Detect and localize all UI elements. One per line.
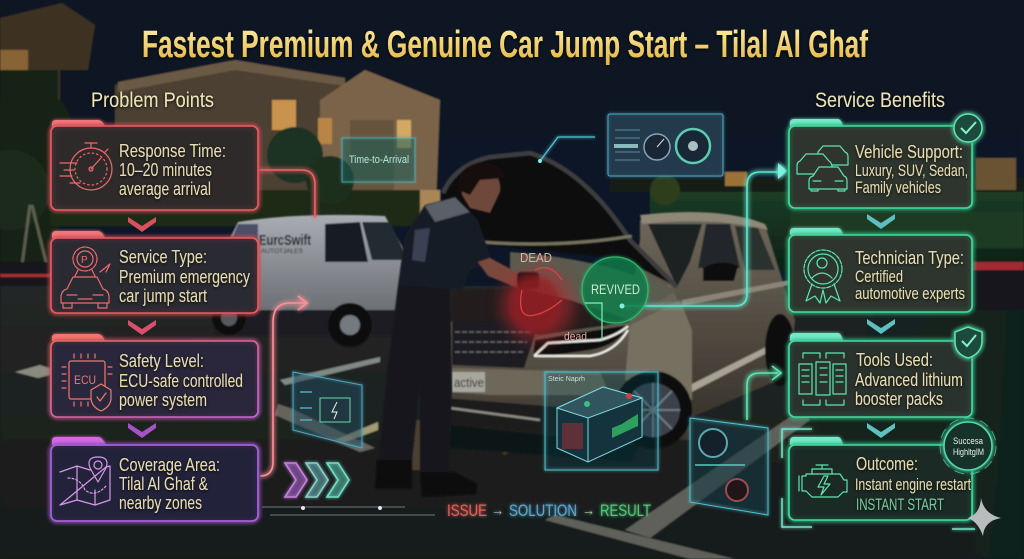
panel: safety level: ECU-safe controlled [119,370,243,391]
status: dead glow: dead [564,331,587,343]
flow caption: issue solution result: ISSUE [447,501,487,520]
status: revived circle [582,257,648,340]
delivery van: EurcSwift [259,232,311,249]
callout: time-to-arrival: Time-to-Arrival [349,154,409,166]
connector: pink line from coverage area with arrow [260,296,307,476]
callout: small battery hologram [293,372,362,448]
badge: success highlight: HighltgIM [953,447,984,457]
panel: outcome [782,429,975,529]
icon: lithium booster packs [799,353,846,405]
arrow: chevron down [128,320,156,335]
panel: outcome: Outcome: [856,453,918,474]
panel: safety level: Safety Level: [119,350,204,371]
panel: technician type: Technician Type: [855,247,964,268]
status: dead glow: DEAD [520,250,552,265]
flow caption: issue solution result: SOLUTION [509,501,577,520]
range rover suv with raised hood [440,153,795,462]
callout: dashboard hud [538,114,723,176]
delivery van: AUTOTJALES [261,249,303,255]
callout: gauges hologram [690,418,768,515]
connector: green line to tools used [747,366,781,420]
connector: red line from response time [258,170,315,218]
panel: response time [51,120,258,210]
panel: outcome: INSTANT START [856,496,944,514]
icon: three cars [797,146,848,191]
icon: ecu chip with shield [62,354,112,411]
flow caption: issue solution result: RESULT [600,501,651,520]
panel: service type: car jump start [119,285,207,306]
range rover suv with raised hood: active [454,376,484,390]
icon: check badge [954,114,982,142]
flow caption: issue solution result: → [491,502,504,518]
panel: vehicle support [789,114,982,208]
arrow: chevron down [867,319,895,334]
heading: problem points: Problem Points [91,89,214,112]
panel: vehicle support: Vehicle Support: [855,141,963,162]
delivery van [212,215,410,347]
panel: tools used: Tools Used: [856,349,933,370]
arrows: triple chevrons [285,463,349,497]
status: revived circle: REVIVED [591,282,640,297]
panel: coverage area: Coverage Area: [119,454,220,475]
panel: coverage area: Tilal Al Ghaf & [119,473,209,494]
panel: tools used [789,327,982,417]
arrow: chevron down [867,423,895,438]
status: dead glow [502,250,587,343]
panel: tools used: booster packs [855,388,943,409]
panel: vehicle support: Luxury, SUV, Sedan, [855,162,968,180]
panel: technician type: Certified [855,268,903,286]
panel: tools used: Advanced lithium [855,369,963,390]
icon: shield check [955,327,982,358]
technician [375,163,539,497]
panel: service type: Premium emergency [119,266,251,287]
panel: safety level: ECU [74,373,96,387]
arrow: chevron down [867,214,895,229]
panel: service type [51,231,258,313]
panel: response time: Response Time: [119,140,226,161]
callout: time-to-arrival [342,138,415,182]
icon: engine with bolt [799,465,847,497]
panel: safety level [51,334,258,417]
panel: coverage area: nearby zones [119,492,202,513]
panel: outcome: Instant engine restart [855,476,971,494]
icon: premium car badge [61,247,110,308]
connector: teal line from revived to vehicle support [622,163,787,306]
icon: map with pin [60,457,110,505]
flow caption: issue solution result [447,501,651,520]
icon: sparkle star [968,498,1001,536]
panel: service type: Service Type: [119,246,207,267]
panel: technician type [789,228,972,312]
callout: battery hologram [545,372,658,470]
flow caption: issue solution result: → [582,502,595,518]
arrow: chevron down [128,423,156,438]
panel: coverage area [51,437,258,521]
panel: vehicle support: Family vehicles [855,179,941,197]
badge: success highlight: Succesa [953,436,983,446]
arrow: chevron down [128,217,156,232]
panel: response time: 10–20 minutes [119,159,212,180]
panel: safety level: power system [119,389,207,410]
icon: certified expert rosette [804,250,842,303]
panel: technician type: automotive experts [855,285,965,303]
decorative progress track [262,506,435,515]
heading: service benefits: Service Benefits [815,89,945,112]
icon: stopwatch [60,143,112,190]
panel: service type: P [81,255,88,266]
badge: success highlight [940,418,996,474]
callout: battery hologram: Steic Naprh [548,376,585,383]
panel: response time: average arrival [119,178,211,199]
